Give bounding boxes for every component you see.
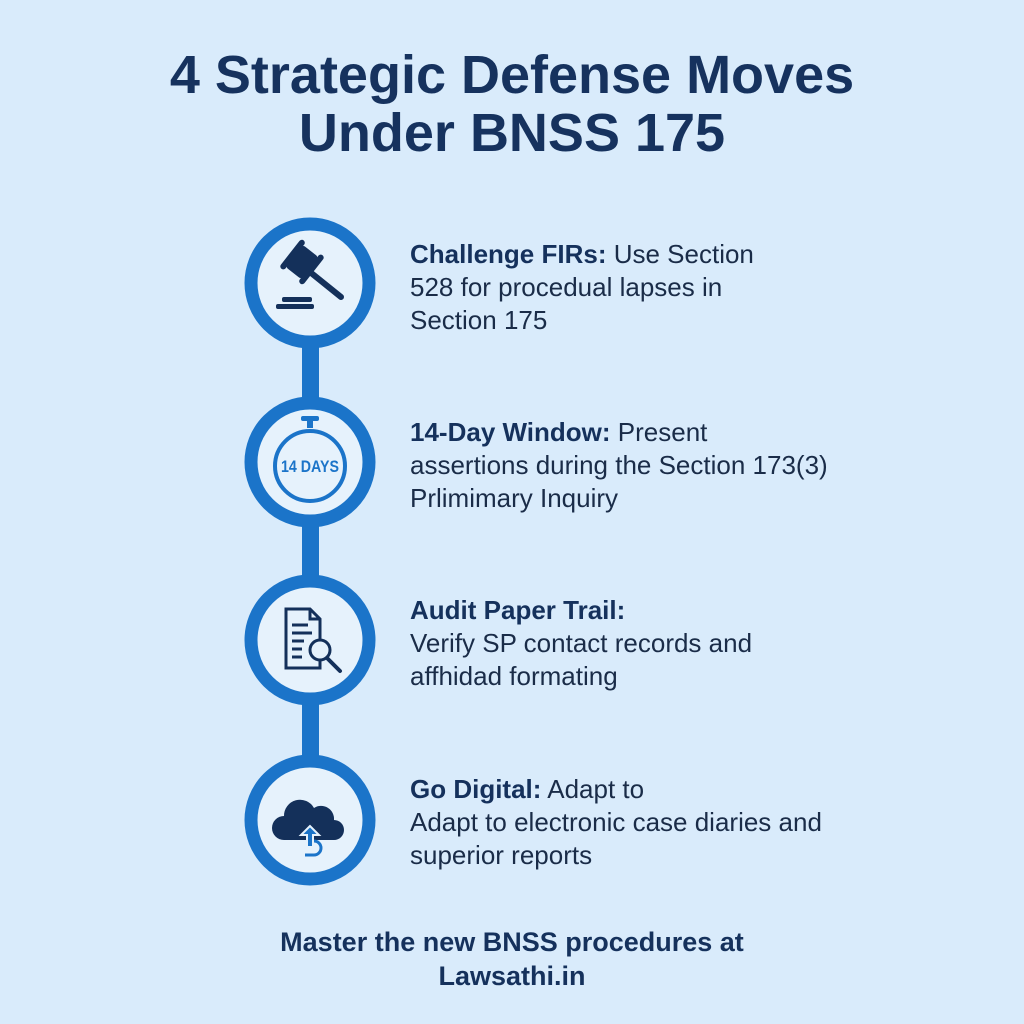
text block 2: assertions during the Section 173(3) bbox=[410, 450, 828, 480]
icon: 14 days stopwatch: 14 DAYS bbox=[281, 457, 339, 476]
text block 2: Prlimimary Inquiry bbox=[410, 483, 618, 513]
icon: cloud upload bbox=[251, 761, 369, 879]
footer bbox=[280, 927, 744, 991]
text block 3 bbox=[410, 595, 752, 691]
text block 4: superior reports bbox=[410, 840, 592, 870]
text block 1: Challenge FIRs: Use Section bbox=[410, 239, 754, 269]
title: 4 Strategic Defense Moves bbox=[170, 45, 854, 105]
text block 4: Go Digital: Adapt to bbox=[410, 774, 644, 804]
footer: Master the new BNSS procedures at bbox=[280, 927, 744, 957]
text block 3: Verify SP contact records and bbox=[410, 628, 752, 658]
text block 2: 14-Day Window: Present bbox=[410, 417, 707, 447]
text block 2 bbox=[410, 417, 828, 513]
title: Under BNSS 175 bbox=[299, 103, 725, 163]
text block 4 bbox=[410, 774, 822, 870]
text block 1: Section 175 bbox=[410, 305, 547, 335]
text block 3: Audit Paper Trail: bbox=[410, 595, 625, 625]
icon: gavel bbox=[251, 224, 369, 342]
footer: Lawsathi.in bbox=[438, 961, 586, 991]
icon: 14 days stopwatch bbox=[251, 403, 369, 521]
text block 1: 528 for procedual lapses in bbox=[410, 272, 722, 302]
title bbox=[170, 45, 854, 163]
text block 1 bbox=[410, 239, 754, 335]
text block 3: affhidad formating bbox=[410, 661, 618, 691]
text block 4: Adapt to electronic case diaries and bbox=[410, 807, 822, 837]
icon: document search bbox=[251, 581, 369, 699]
